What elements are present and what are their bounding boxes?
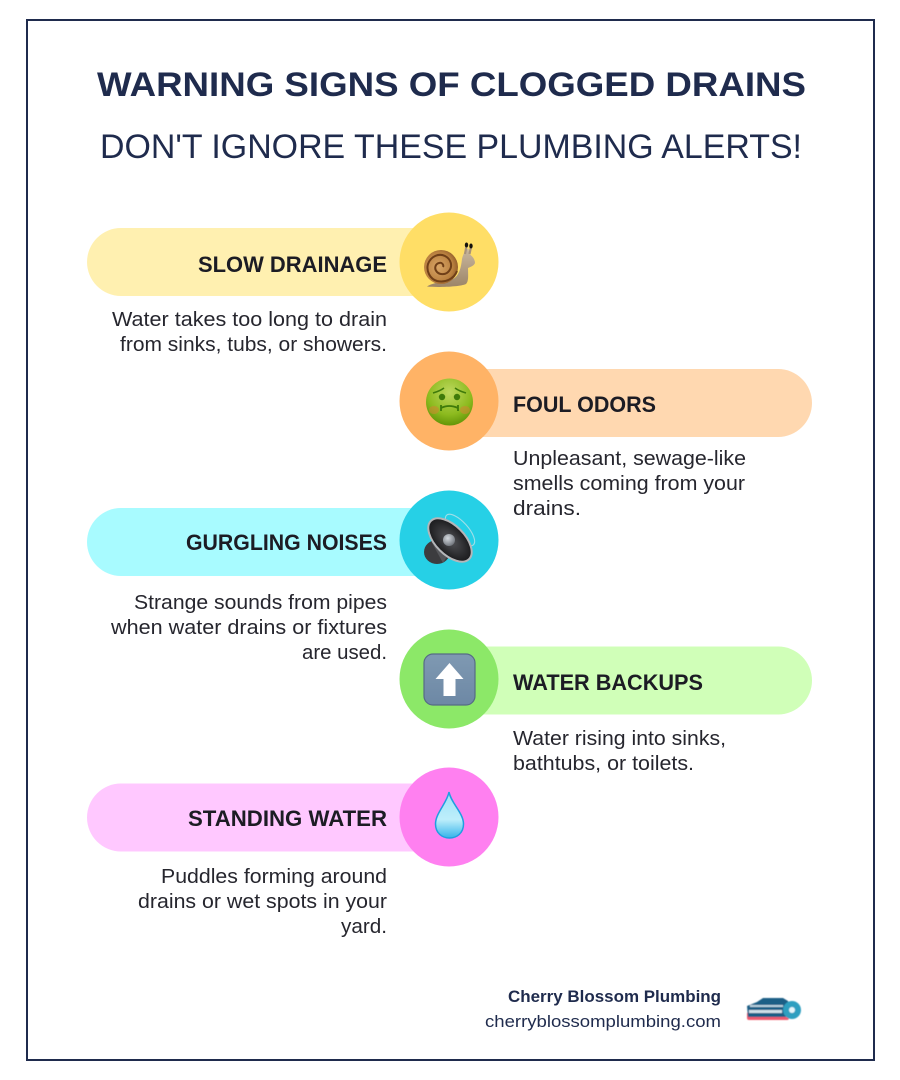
circle: water backups: [400, 630, 498, 728]
heading: slow drainage: SLOW DRAINAGE: [198, 252, 387, 277]
description: water backups: Water rising into sinks,: [513, 727, 726, 750]
description: gurgling noises: Strange sounds from pipes: [134, 591, 387, 614]
title: WARNING SIGNS OF CLOGGED DRAINS: [97, 66, 806, 104]
icon: nauseated face: [426, 378, 473, 426]
description: water backups: bathtubs, or toilets.: [513, 752, 694, 775]
description: foul odors: Unpleasant, sewage-like: [513, 447, 746, 470]
description: gurgling noises: are used.: [302, 641, 387, 664]
icon: water drop: [436, 792, 464, 838]
pill: standing water: [87, 784, 450, 852]
icon: snail: [424, 242, 475, 287]
description: slow drainage: Water takes too long to drain: [112, 308, 387, 331]
pill: gurgling noises: [87, 508, 450, 576]
circle: gurgling noises: [400, 490, 498, 590]
website: cherryblossomplumbing.com: [485, 1012, 721, 1031]
circle: foul odors: [400, 352, 498, 450]
description: standing water: Puddles forming around: [161, 865, 387, 888]
heading: foul odors: FOUL ODORS: [513, 392, 656, 417]
footer: [485, 988, 801, 1031]
panel: foul odors: [400, 352, 812, 520]
panel: water backups: [400, 630, 812, 775]
heading: water backups: WATER BACKUPS: [513, 670, 703, 695]
logo: [747, 998, 801, 1020]
brand name: Cherry Blossom Plumbing: [508, 988, 721, 1006]
heading: gurgling noises: GURGLING NOISES: [186, 530, 387, 555]
subtitle: DON'T IGNORE THESE PLUMBING ALERTS!: [100, 128, 802, 166]
description: slow drainage: [112, 308, 387, 356]
pill: slow drainage: [87, 228, 450, 296]
icon: up arrow button: [424, 654, 475, 705]
panel: slow drainage: [87, 212, 499, 356]
pill: water backups: [449, 646, 812, 714]
heading: standing water: STANDING WATER: [188, 806, 387, 831]
pill: foul odors: [449, 369, 812, 437]
description: slow drainage: from sinks, tubs, or showers.: [120, 333, 387, 356]
circle: slow drainage: [400, 212, 498, 312]
description: water backups: [513, 727, 726, 775]
description: foul odors: [513, 447, 746, 520]
description: standing water: yard.: [341, 915, 387, 938]
icon: speaker: [421, 510, 479, 569]
panel: standing water: [87, 768, 498, 938]
circle: standing water: [400, 768, 498, 866]
description: foul odors: smells coming from your: [513, 472, 745, 495]
description: foul odors: drains.: [513, 497, 581, 520]
description: standing water: drains or wet spots in your: [138, 890, 387, 913]
description: gurgling noises: when water drains or fixtures: [110, 616, 387, 639]
description: gurgling noises: [110, 591, 387, 664]
description: standing water: [138, 865, 387, 938]
panel: gurgling noises: [87, 490, 498, 664]
